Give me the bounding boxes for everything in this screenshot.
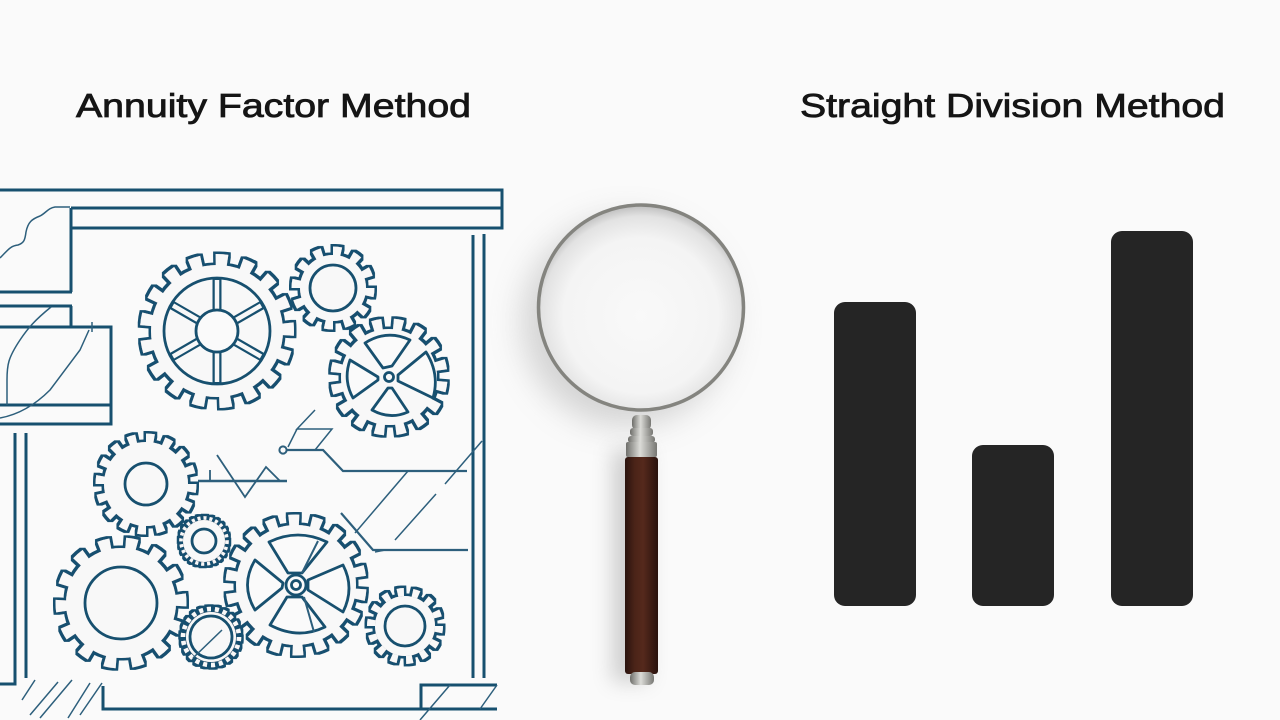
end cap bbox=[630, 672, 654, 685]
handle bbox=[625, 457, 658, 674]
gear 3: bladed gear bbox=[332, 320, 446, 434]
bar 2 bbox=[972, 445, 1054, 606]
lens bbox=[538, 205, 744, 410]
gear 4: medium ring gear bbox=[100, 438, 192, 530]
gear 8: small fine-toothed gear with ring bbox=[183, 609, 239, 665]
bar 1 bbox=[834, 302, 916, 606]
bar chart bbox=[834, 231, 1193, 606]
gear 1: large spoked gear bbox=[139, 253, 295, 409]
icon: magnifying glass bbox=[522, 205, 744, 685]
gear 7: large bladed gear bbox=[227, 516, 365, 654]
gear 9: small ring gear right bbox=[371, 592, 439, 660]
magnifier shadow bbox=[522, 218, 730, 682]
heading: Straight Division Method: Straight Division Method bbox=[800, 87, 1225, 124]
gear 6: small fine-toothed gear bbox=[181, 518, 227, 564]
gear 5: large ring gear bbox=[53, 535, 189, 671]
gear 2: small ring gear bbox=[296, 251, 370, 325]
thin sketch lines bbox=[0, 207, 497, 720]
panel: blueprint with gears bbox=[0, 190, 502, 720]
ferrule bbox=[626, 415, 657, 457]
blueprint frame lines bbox=[0, 190, 502, 709]
bar 3 bbox=[1111, 231, 1193, 606]
circuit traces bbox=[198, 446, 468, 550]
heading: Annuity Factor Method: Annuity Factor Method bbox=[76, 87, 471, 124]
